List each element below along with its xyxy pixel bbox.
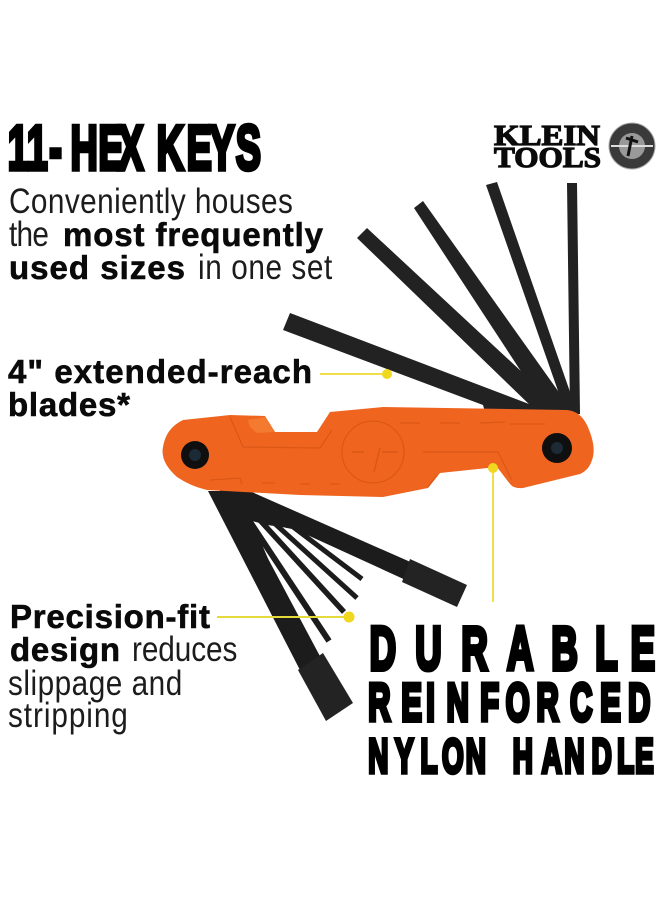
icon: right pivot screw	[542, 433, 572, 463]
orange handle	[163, 407, 594, 497]
callout: design leader	[217, 612, 354, 622]
text block: intro: in one set	[198, 248, 332, 287]
text block: extended-reach blades	[8, 353, 312, 423]
title: 11-hex keys: 11-HEX KEYS	[8, 114, 261, 184]
callout: handle leader	[488, 463, 498, 602]
callout: blades leader	[320, 369, 392, 379]
text block: precision-fit design: slippage and	[8, 664, 182, 703]
logo: Klein Tools: KLEIN	[494, 120, 600, 152]
hex keys: upper fan	[283, 182, 580, 414]
text block: precision-fit design	[8, 598, 237, 735]
heading: durable reinforced nylon handle: NYLON HANDLE	[368, 730, 654, 784]
heading: durable reinforced nylon handle	[368, 614, 655, 784]
text block: precision-fit design: stripping	[8, 696, 128, 735]
text block: intro: most frequently	[63, 216, 324, 253]
text block: precision-fit design: design	[10, 631, 120, 668]
text block: intro: used sizes	[9, 249, 185, 286]
text block: extended-reach blades: 4" extended-reach	[8, 353, 312, 390]
icon: logo badge	[609, 123, 655, 169]
logo: Klein Tools	[494, 120, 655, 174]
text block: extended-reach blades: blades*	[8, 386, 130, 423]
logo: Klein Tools: TOOLS	[494, 143, 601, 174]
text block: precision-fit design: Precision-fit	[10, 598, 210, 635]
icon: left pivot screw	[181, 441, 209, 469]
key with right socket	[220, 478, 467, 607]
text block: intro: the	[9, 215, 49, 254]
key with left socket	[208, 491, 353, 721]
hex keys: lower fan	[208, 478, 467, 721]
text block: intro: Conveniently houses	[9, 182, 293, 221]
text block: intro	[9, 182, 332, 287]
thin keys	[225, 482, 362, 641]
text block: precision-fit design: reduces	[132, 630, 237, 669]
heading: durable reinforced nylon handle: DURABLE	[370, 614, 655, 683]
heading: durable reinforced nylon handle: REINFORCED	[368, 674, 650, 733]
merged key bases	[208, 491, 297, 568]
